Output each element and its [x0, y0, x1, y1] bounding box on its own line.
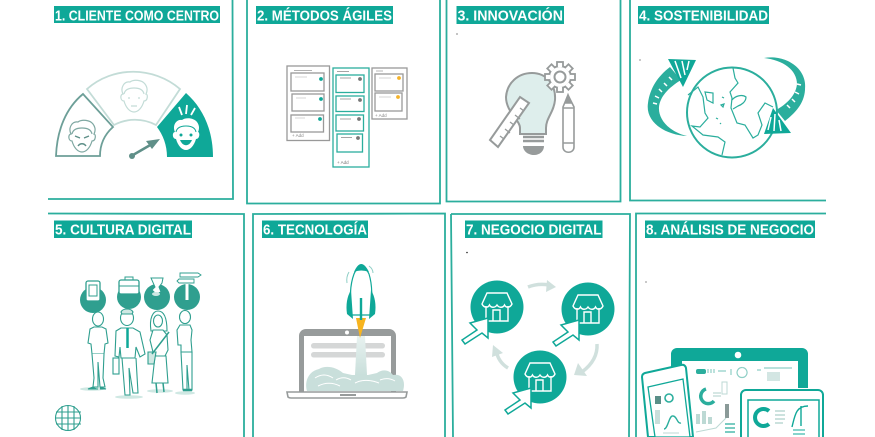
devices with dashboards [642, 348, 823, 437]
kanban board [287, 66, 407, 167]
pencil [563, 95, 574, 152]
panel: 5. cultura digital [48, 214, 244, 437]
heading: cliente como centro: 1. CLIENTE COMO CENTRO [55, 8, 219, 24]
icon bubble: phone [80, 281, 106, 313]
laptop [287, 329, 407, 398]
gear [545, 62, 575, 92]
monitor dashboard [671, 348, 808, 437]
icon: satisfaction gauge [56, 72, 213, 159]
globe [687, 68, 777, 158]
icon: globe with circular arrows [648, 57, 805, 158]
icon: lightbulb with gear, ruler and pencil [490, 62, 575, 155]
panel: 2. metodos agiles [247, 0, 440, 204]
person 3 [147, 311, 173, 393]
heading: tecnologia: 6. TECNOLOGÍA [263, 222, 367, 238]
heading: cultura digital: 5. CULTURA DIGITAL [55, 222, 191, 238]
gauge needle arrow [129, 139, 160, 159]
cycle arrows [496, 284, 597, 372]
gauge segment: happy face [157, 93, 213, 157]
kanban column 2: + Add [337, 160, 349, 165]
kanban column 1: + Add [292, 133, 304, 138]
speck [466, 252, 468, 253]
panel: 6. tecnologia [253, 214, 445, 437]
group of four people with icons [80, 273, 201, 399]
person 2 [113, 309, 145, 399]
tablet dashboard [741, 390, 823, 437]
rocket [346, 264, 376, 338]
icon bubble: briefcase [117, 277, 141, 309]
speck [639, 59, 641, 61]
icon: grid globe logo [55, 405, 81, 431]
arrow: right curved [764, 57, 805, 134]
panel: 8. analisis de negocio [636, 214, 826, 437]
speck [456, 33, 458, 35]
cycle of online stores [462, 280, 614, 414]
rocket exhaust smoke [306, 336, 404, 391]
gauge segment: unhappy face [56, 94, 113, 156]
lightbulb [506, 73, 555, 155]
store with cursor 3 [505, 350, 566, 414]
heading: metodos agiles: 2. MÉTODOS ÁGILES [257, 8, 392, 24]
heading: negocio digital: 7. NEGOCIO DIGITAL [466, 222, 602, 238]
panel: 3. innovacion [446, 0, 620, 202]
arrow: left curved [648, 59, 696, 136]
kanban column 3: + Add [375, 113, 387, 118]
icon bubble: signpost [174, 273, 201, 310]
ruler [490, 97, 529, 147]
store with cursor 2 [553, 282, 614, 346]
heading: sostenibilidad: 4. SOSTENIBILIDAD [639, 8, 768, 24]
heading: analisis de negocio: 8. ANÁLISIS DE NEGOCIO [646, 222, 814, 238]
phone dashboard [642, 365, 693, 437]
panel: 4. sostenibilidad [630, 0, 826, 200]
gauge segment: neutral face [87, 72, 180, 125]
panel: 1. cliente como centro [48, 0, 233, 199]
person 4 [175, 310, 195, 395]
speck [645, 281, 647, 283]
store with cursor 1 [462, 280, 524, 344]
icon bubble: hourglass [144, 278, 170, 310]
panel: 7. negocio digital [451, 214, 630, 437]
person 1 [80, 312, 108, 391]
heading: innovacion: 3. INNOVACIÓN [458, 6, 563, 24]
